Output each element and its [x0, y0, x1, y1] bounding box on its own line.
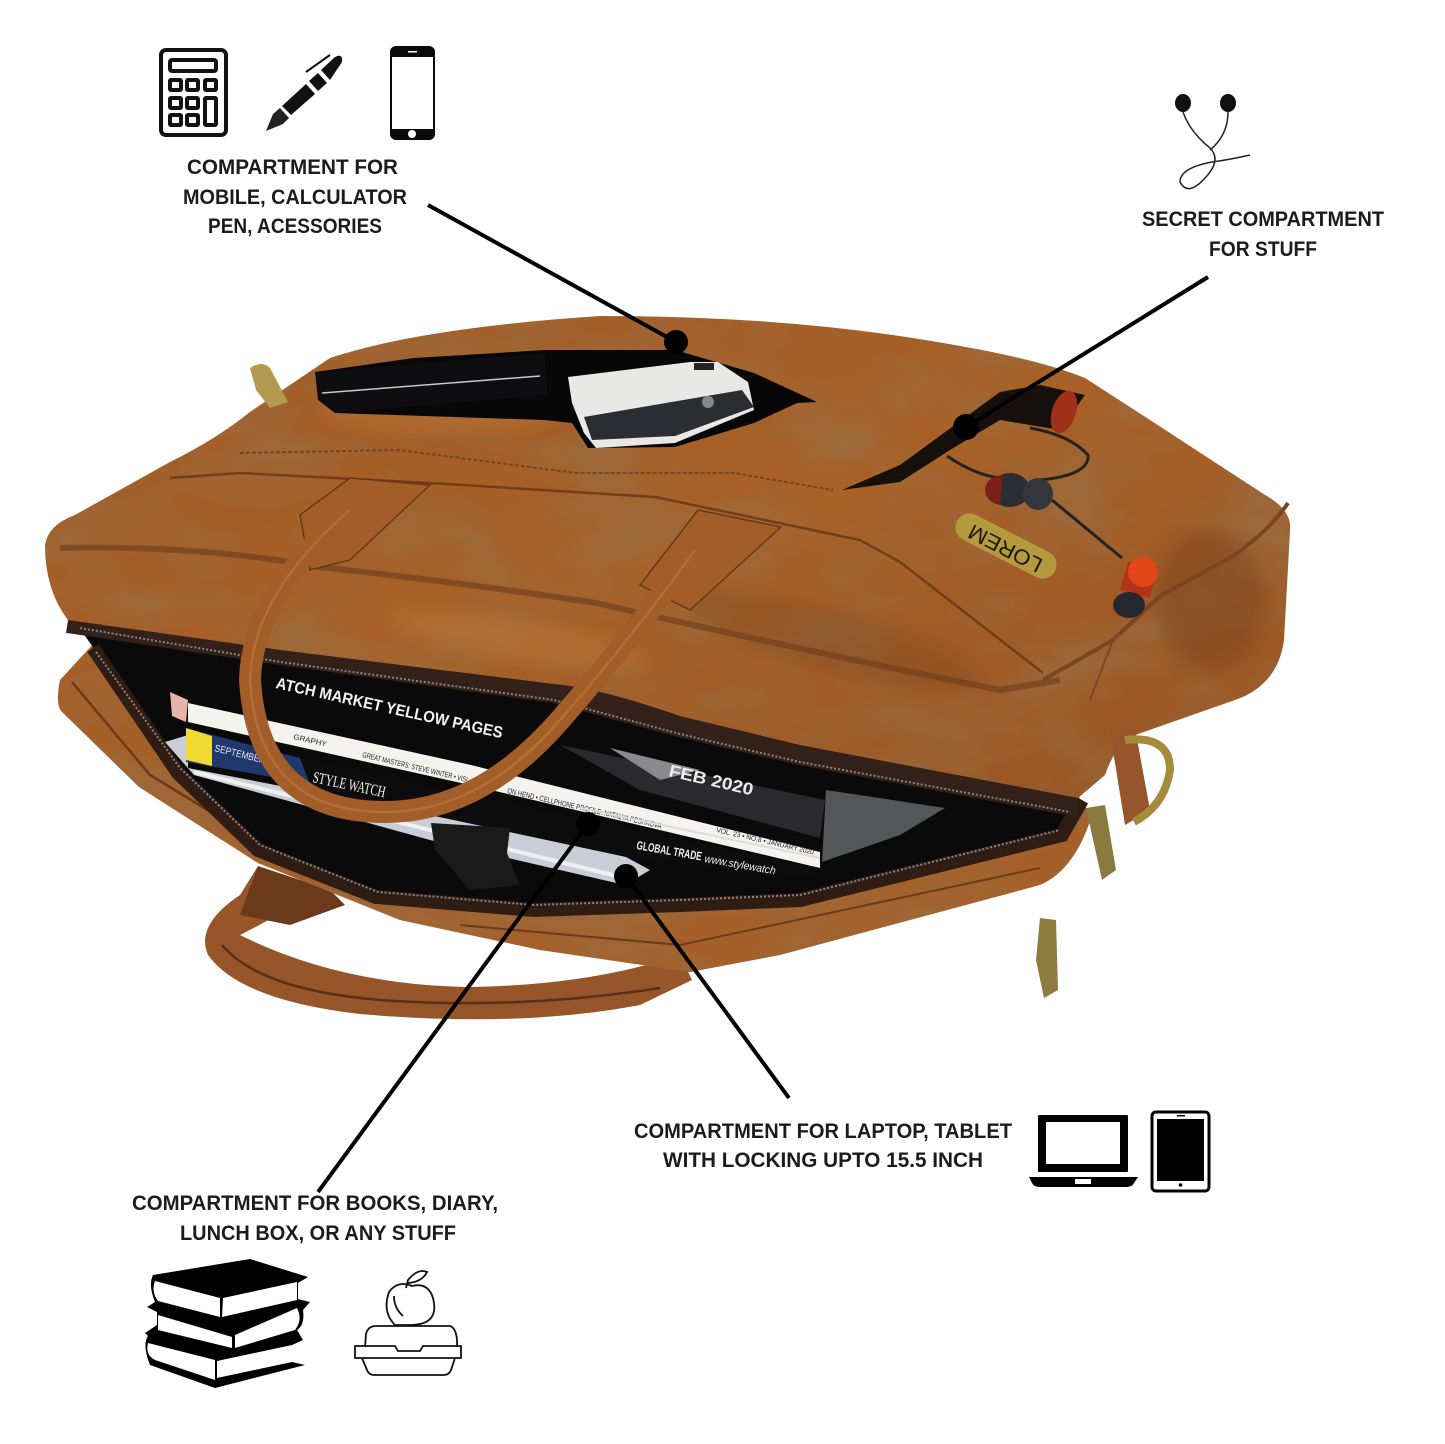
rear carry handle: [205, 866, 692, 1019]
main bag body: [45, 316, 1290, 798]
shoulder strap loop and D-ring: [1110, 728, 1170, 825]
LOREM gold badge: LOREM: [965, 519, 1046, 576]
text: secret compartment: SECRET COMPARTMENT: [1142, 208, 1384, 231]
books and magazines: [170, 655, 945, 878]
icon: laptop: [1029, 1115, 1138, 1187]
callout line: books compartment: [318, 812, 600, 1192]
upper zipper teeth: [80, 628, 1070, 812]
blue September magazine: SEPTEMBER: [213, 743, 266, 766]
callout line: mobile compartment: [428, 205, 688, 354]
icon: tablet: [1152, 1112, 1209, 1191]
lower zipper teeth: [96, 652, 1060, 905]
open main compartment interior: [68, 612, 1078, 905]
callout line: laptop compartment: [614, 864, 789, 1098]
lower zipper band: [93, 648, 1082, 910]
white journal: [188, 703, 820, 868]
silver laptop: [165, 735, 650, 885]
text: mobile compartment: [183, 156, 407, 238]
black magazine: ATCH MARKET YELLOW PAGES: [274, 675, 505, 742]
icon: stack of books: [145, 1259, 310, 1388]
white journal: VOL. 23 • NO.8 • JANUARY 2020: [716, 827, 815, 856]
Style Watch magazine: STYLE WATCH: [311, 769, 387, 801]
text: secret compartment: FOR STUFF: [1209, 238, 1317, 261]
blue September magazine: [186, 728, 312, 784]
zipper pulls: [250, 364, 1116, 998]
white power bank: [568, 362, 754, 448]
black pen: [315, 353, 548, 413]
text: laptop compartment: WITH LOCKING UPTO 15.5 INCH: [663, 1149, 983, 1172]
bag photo: [45, 316, 1290, 1019]
white journal: GREAT MASTERS: STEVE WINTER • VISI: [362, 750, 469, 784]
Style Watch magazine: [300, 758, 820, 878]
secret pocket and flap: [842, 385, 1085, 490]
lower bag flap: [58, 642, 1092, 972]
earphones: [947, 428, 1158, 618]
black magazine: FEB 2020: [667, 761, 755, 799]
LOREM gold badge: [951, 509, 1061, 583]
front pocket with pen and device: [315, 350, 817, 448]
icon: smartphone: [390, 46, 435, 140]
text: laptop compartment: [634, 1120, 1012, 1172]
icon: calculator: [161, 50, 226, 135]
text: mobile compartment: MOBILE, CALCULATOR: [183, 186, 407, 209]
text: books compartment: LUNCH BOX, OR ANY STUFF: [180, 1222, 456, 1245]
black magazine: [179, 655, 830, 842]
pink bookmark: [170, 692, 188, 722]
text: secret compartment: [1142, 208, 1384, 261]
text: books compartment: [132, 1192, 498, 1245]
Style Watch magazine: GLOBAL TRADE: [635, 838, 703, 863]
icon: fountain pen: [266, 55, 342, 131]
text: books compartment: COMPARTMENT FOR BOOKS, DIARY,: [132, 1192, 498, 1215]
Style Watch magazine: www.stylewatch: [703, 853, 776, 877]
text: laptop compartment: COMPARTMENT FOR LAPTOP, TABLET: [634, 1120, 1012, 1143]
front carry handle: [250, 478, 781, 812]
icon: earphones: [1175, 94, 1250, 189]
text: mobile compartment: COMPARTMENT FOR: [187, 156, 398, 179]
icon: apple and lunch box: [355, 1271, 461, 1375]
upper zipper band: [68, 620, 1078, 804]
grey page block: [822, 790, 945, 862]
white journal: ON HEND • CELLPHONE PROFILE: NATALYA PESHKOVA: [507, 786, 663, 830]
text: mobile compartment: PEN, ACESSORIES: [208, 215, 382, 238]
callout line: secret compartment: [953, 277, 1208, 440]
white journal: GRAPHY: [293, 732, 328, 749]
webbing strap: [431, 823, 520, 890]
